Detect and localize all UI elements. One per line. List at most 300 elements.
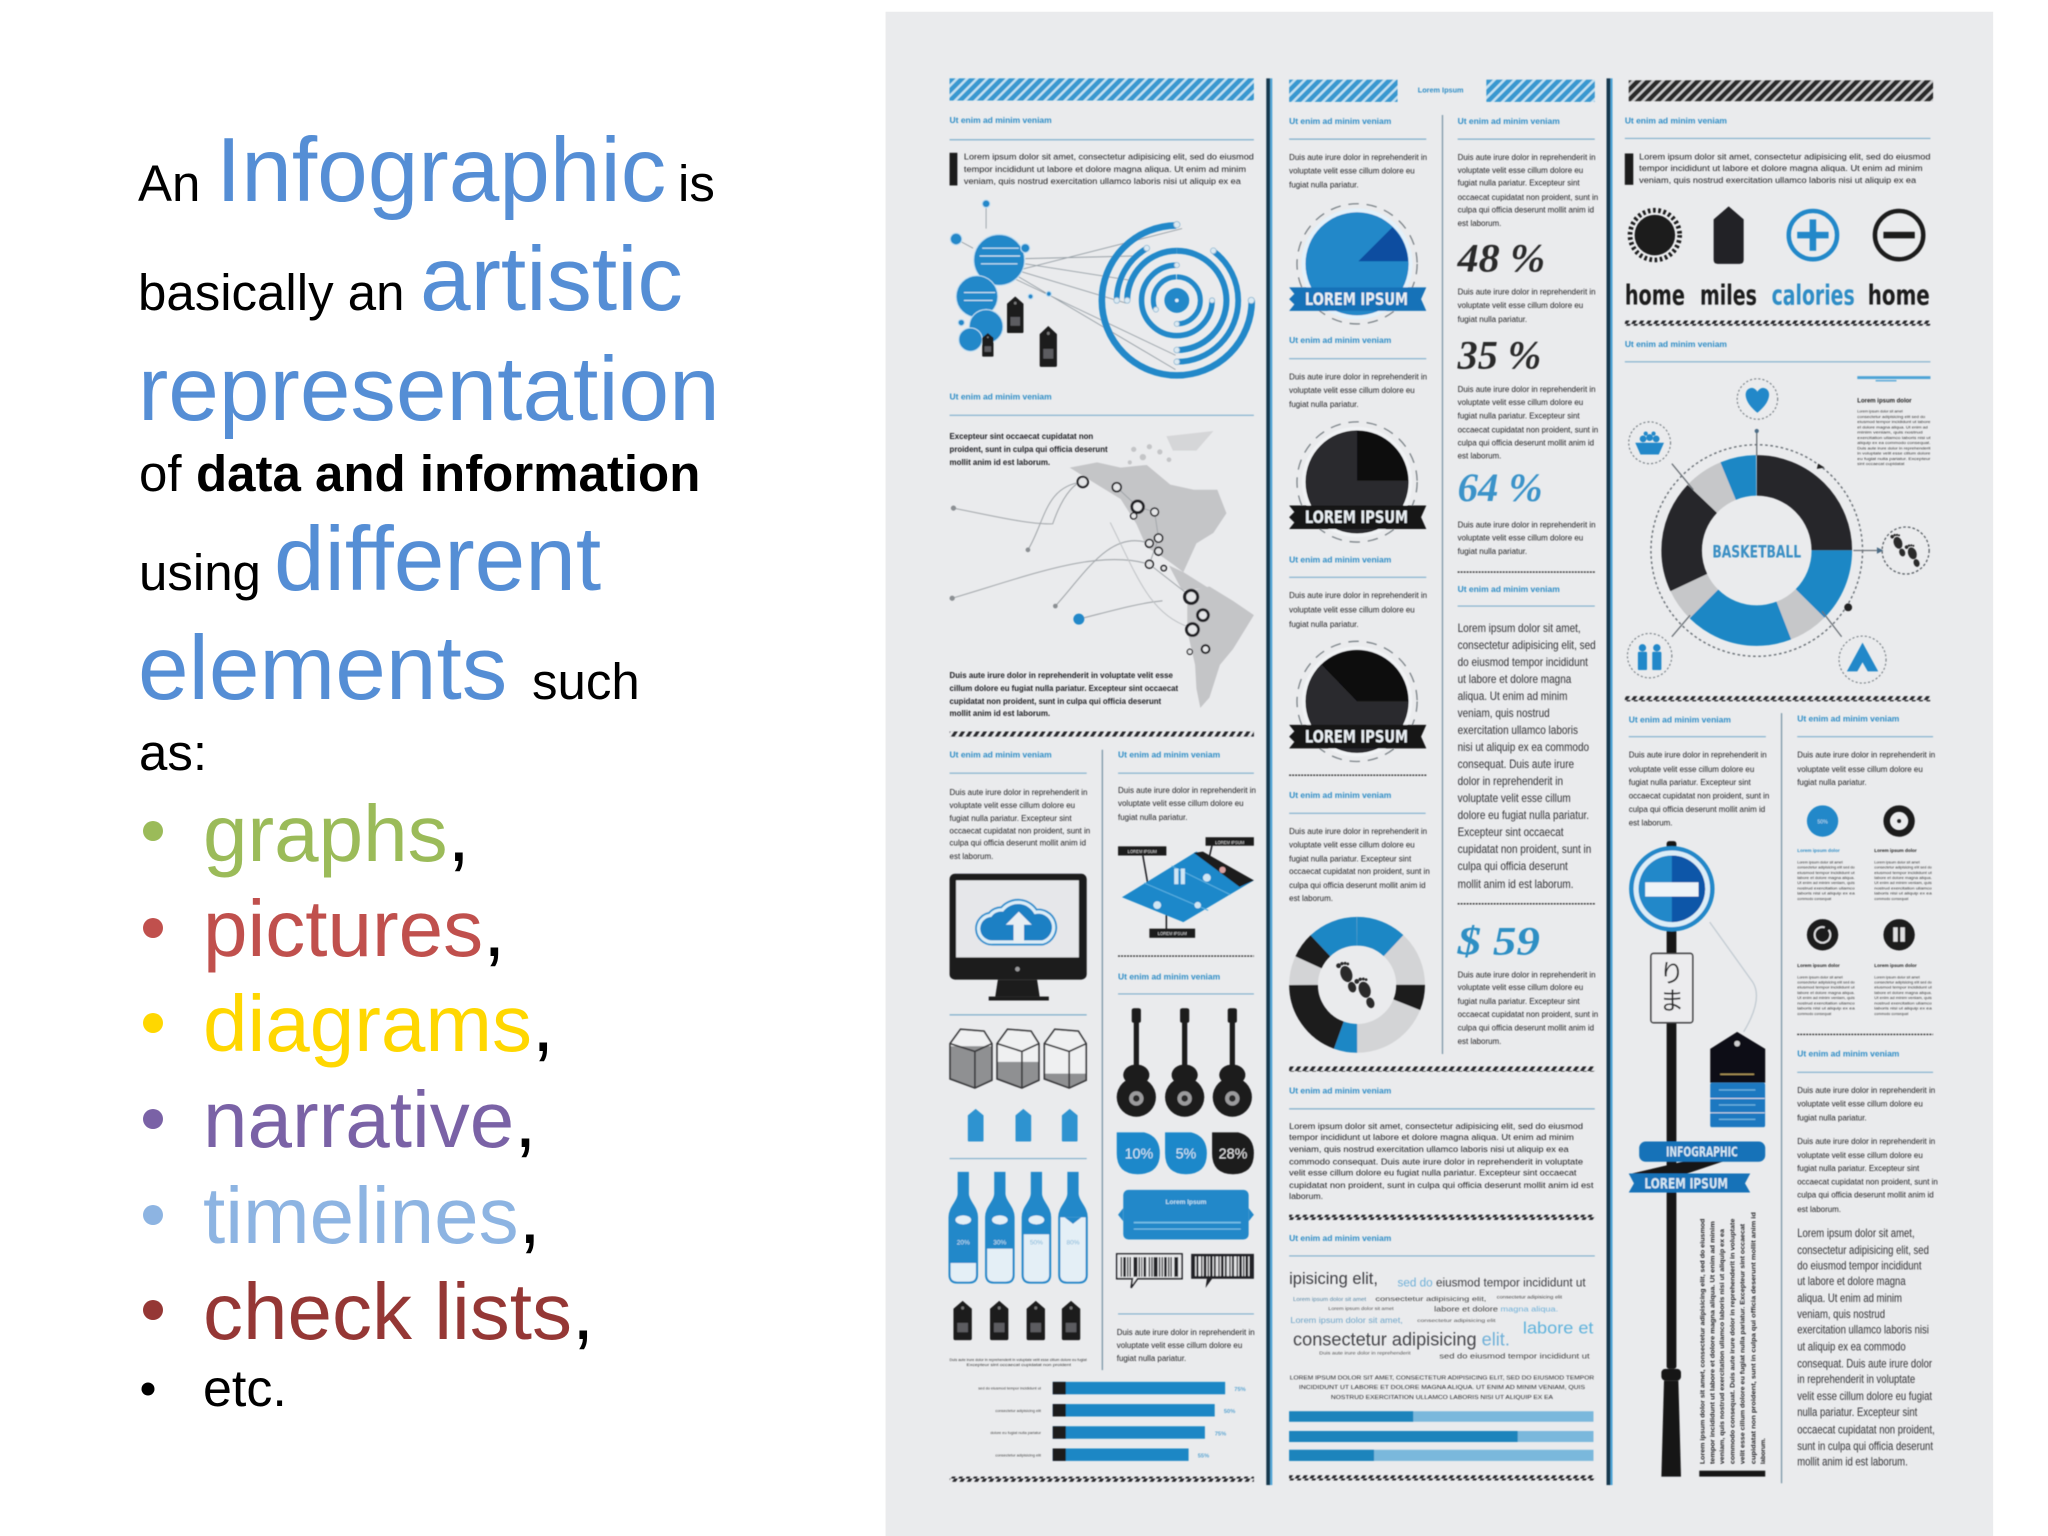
paragraph: fugiat nulla pariatur. — [1289, 181, 1359, 190]
bottles: 50% — [1030, 1240, 1043, 1247]
basketball donut with surrounding icons — [1627, 379, 1929, 683]
paragraph: voluptate velit esse cillum dolore eu — [1797, 1099, 1923, 1108]
rotated text block: laborum. — [1760, 1438, 1767, 1464]
four icon blurbs: labore et dolore magna aliqua. — [1874, 876, 1932, 880]
four icon blurbs: consectetur adipisicing elit sed do — [1797, 866, 1855, 870]
four icon blurbs: commodo consequat — [1797, 1012, 1832, 1016]
lower-left sub-column — [950, 750, 1090, 1367]
four icon blurbs: commodo consequat — [1874, 1012, 1909, 1016]
black tags under bottles — [953, 1301, 1080, 1340]
paragraph: fugiat nulla pariatur. — [1117, 1354, 1186, 1363]
diagram: bubbles linked to concentric rings — [950, 200, 1254, 375]
long text block — [1458, 622, 1596, 891]
column divider bars — [1266, 78, 1613, 1485]
barcodes — [1117, 1254, 1254, 1288]
heading: Ut enim ad minim veniam — [1797, 714, 1899, 724]
paragraph: est laborum. — [1289, 894, 1333, 903]
full-width paragraph: cupidatat non proident, sunt in culpa qui officia deserunt mollit anim id est — [1289, 1181, 1594, 1190]
paragraph: fugiat nulla pariatur. — [1289, 620, 1359, 629]
percentage drops: 10% — [1125, 1147, 1154, 1163]
right column lower-right — [1797, 714, 1938, 1469]
icon: tag — [1714, 206, 1744, 264]
four icon blurbs: laboris nisi ut aliquip ex ea — [1874, 1007, 1933, 1011]
line: as: as: — [139, 724, 207, 781]
long text block: dolor in reprehenderit in — [1458, 775, 1563, 788]
heading: Ut enim ad minim veniam — [1289, 554, 1391, 564]
caps caption — [1290, 1375, 1594, 1401]
right column top — [1625, 80, 1933, 701]
paragraph: voluptate velit esse cillum dolore eu — [1289, 386, 1415, 395]
paragraph: occaecat cupidatat non proident, sunt in — [950, 826, 1090, 835]
stat 64 percent: 64 % — [1458, 465, 1543, 510]
concentric ring chart — [1102, 225, 1252, 375]
paragraph: fugiat nulla pariatur. — [1458, 547, 1527, 556]
bullet list: narrative, — [203, 1075, 536, 1164]
intro block with bar: veniam, quis nostrud exercitation ullamco laboris nisi ut aliquip ex ea — [1639, 176, 1917, 185]
heading: Ut enim ad minim veniam — [1289, 1233, 1391, 1243]
icon labels — [1625, 280, 1930, 311]
paragraph: fugiat nulla pariatur. — [1458, 315, 1527, 324]
four icon blurbs: nostrud exercitation ullamco — [1874, 886, 1932, 890]
long text block: aliqua. Ut enim ad minim — [1458, 690, 1567, 703]
long text block: consectetur adipisicing elit, sed — [1458, 639, 1596, 652]
line: elements such: such — [532, 653, 640, 710]
long text block: culpa qui officia deserunt — [1458, 860, 1568, 873]
paragraph: voluptate velit esse cillum dolore eu — [1629, 765, 1754, 774]
paragraph: voluptate velit esse cillum dolore eu — [1118, 799, 1244, 808]
icon: ship — [1629, 422, 1671, 464]
heading: Ut enim ad minim veniam — [1629, 714, 1731, 724]
four icon blurbs: eiusmod tempor incididunt ut — [1874, 986, 1933, 990]
dark pie badge two: LOREM IPSUM — [1305, 728, 1408, 748]
long text block: exercitation ullamco laboris nisi — [1797, 1324, 1929, 1337]
intro block with bar: tempor incididunt ut labore et dolore magna aliqua. Ut enim ad minim — [1639, 164, 1923, 173]
hanging black tags — [982, 296, 1057, 367]
long text block: ut aliquip ex ea commodo — [1797, 1341, 1906, 1354]
route rings — [1078, 477, 1209, 654]
horizontal bar chart: consectetur adipisicing elit — [995, 1408, 1042, 1413]
full-width paragraph: laborum. — [1289, 1192, 1323, 1201]
paragraph: voluptate velit esse cillum dolore eu — [950, 801, 1075, 810]
side note — [1857, 376, 1932, 466]
four icon blurbs — [1797, 805, 1933, 1016]
paragraph — [1797, 1137, 1938, 1214]
map intro text — [950, 431, 1108, 467]
four icon blurbs: laboris nisi ut aliquip ex ea — [1874, 892, 1933, 896]
section heading: Ut enim ad minim veniam — [950, 115, 1052, 125]
heading: Ut enim ad minim veniam — [1625, 116, 1727, 126]
long text block: do eiusmod tempor incididunt — [1458, 656, 1588, 669]
striped header bar — [950, 78, 1254, 101]
four icon blurbs: Lorem ipsum dolor — [1874, 963, 1917, 968]
map caption: mollit anim id est laborum. — [950, 708, 1050, 718]
paragraph: culpa qui officia deserunt mollit anim id — [1458, 1024, 1594, 1033]
long text block: ut labore et dolore magna — [1458, 673, 1572, 686]
guitars — [1117, 1008, 1252, 1117]
four icon blurbs: nostrud exercitation ullamco — [1797, 886, 1855, 890]
map of the Americas with route rings — [950, 431, 1254, 708]
percentage drops — [1117, 1132, 1254, 1174]
icon: minus — [1875, 211, 1923, 259]
word cloud: consectetur adipisicing elit. — [1293, 1328, 1510, 1349]
four icon blurbs: eiusmod tempor incididunt ut — [1874, 871, 1933, 875]
long text block: Lorem ipsum dolor sit amet, — [1797, 1227, 1915, 1240]
paragraph: Duis aute irure dolor in reprehenderit in — [1289, 153, 1427, 162]
four icon blurbs: Ut enim ad minim veniam, quis — [1874, 881, 1932, 885]
side note: Duis aute irure dolor in reprehenderit — [1857, 446, 1932, 450]
rotated text block — [1699, 1212, 1767, 1464]
four icon blurbs: 50% — [1817, 820, 1828, 826]
icon: plus — [1789, 211, 1837, 259]
line: of data and information: of — [139, 445, 182, 502]
long text block: occaecat cupidatat non proident, — [1797, 1424, 1935, 1437]
rotated text block: veniam, quis nostrud exercitation ullamco laboris nisi ut aliquip ex ea — [1719, 1229, 1726, 1464]
paragraph: Duis aute irure dolor in reprehenderit in — [1458, 521, 1596, 530]
long text block: consequat. Duis aute irure dolor — [1797, 1358, 1932, 1371]
long text block: veniam, quis nostrud — [1797, 1308, 1885, 1321]
paragraph: voluptate velit esse cillum dolore eu — [1117, 1341, 1242, 1350]
paragraph: Duis aute irure dolor in reprehenderit in — [1289, 827, 1427, 836]
four icon blurbs: consectetur adipisicing elit sed do — [1874, 866, 1932, 870]
blue bubbles — [950, 200, 1051, 351]
four icon blurbs: laboris nisi ut aliquip ex ea — [1797, 1007, 1856, 1011]
full-width paragraph: commodo consequat. Duis aute irure dolor in reprehenderit in voluptate — [1289, 1157, 1584, 1166]
tiny note: Duis aute irure dolor in reprehenderit in voluptate velit esse cillum dolore eu fugiat — [950, 1358, 1088, 1362]
heading: Ut enim ad minim veniam — [1289, 1086, 1391, 1096]
paragraph — [1289, 153, 1427, 190]
word cloud: consectetur adipisicing elit — [1497, 1294, 1563, 1299]
rotated text block: tempor incididunt ut labore et dolore magna aliqua. Ut enim ad minim — [1709, 1221, 1716, 1464]
paragraph: Duis aute irure dolor in reprehenderit in — [1458, 971, 1596, 980]
isometric map tile: LOREM IPSUM — [1158, 931, 1187, 936]
long text block: do eiusmod tempor incididunt — [1797, 1260, 1922, 1273]
side note: exercitation ullamco laboris nisi ut — [1857, 436, 1932, 440]
caps caption: LOREM IPSUM DOLOR SIT AMET, CONSECTETUR ADIPISICING ELIT, SED DO EIUSMOD TEMPOR — [1290, 1375, 1594, 1381]
blue ribbon box: Lorem Ipsum — [1165, 1199, 1207, 1206]
word cloud: sed do eiusmod tempor incididunt ut — [1439, 1353, 1590, 1360]
paragraph: voluptate velit esse cillum dolore eu — [1289, 167, 1415, 176]
line: elements such: elements — [138, 618, 507, 719]
side note: eiusmod tempor incididunt ut labore — [1857, 420, 1930, 424]
icon: people — [1627, 633, 1672, 678]
line: An Infographic is: Infographic — [216, 120, 666, 221]
paragraph: culpa qui officia deserunt mollit anim id — [1458, 438, 1594, 447]
paragraph: voluptate velit esse cillum dolore eu — [1458, 534, 1583, 543]
paragraph — [1629, 751, 1769, 827]
heading: Ut enim ad minim veniam — [1118, 750, 1220, 760]
bullet list: pictures, — [203, 884, 505, 973]
paragraph: Duis aute irure dolor in reprehenderit in — [1797, 751, 1935, 760]
section heading: map: Ut enim ad minim veniam — [950, 392, 1052, 402]
monitor with cloud upload icon — [950, 874, 1087, 1000]
side note: in voluptate velit esse cillum dolore — [1857, 452, 1930, 456]
paragraph: Duis aute irure dolor in reprehenderit in — [1629, 751, 1767, 760]
paragraph: fugiat nulla pariatur. Excepteur sint — [1458, 997, 1580, 1006]
paragraph: fugiat nulla pariatur. — [1797, 1114, 1867, 1123]
word cloud: ipisicing elit, — [1289, 1269, 1378, 1288]
paragraph — [1458, 971, 1598, 1046]
paragraph — [1289, 373, 1427, 409]
horizontal bar chart: dolore eu fugiat nulla pariatur — [990, 1430, 1042, 1435]
paragraph: fugiat nulla pariatur. Excepteur sint — [950, 814, 1072, 823]
long text block: velit esse cillum dolore eu fugiat — [1797, 1390, 1932, 1403]
line: representation: representation — [138, 339, 720, 440]
long text block: aliqua. Ut enim ad minim — [1797, 1292, 1902, 1306]
bullet list: etc. — [203, 1360, 287, 1418]
paragraph: fugiat nulla pariatur. Excepteur sint — [1458, 178, 1580, 187]
long text block: mollit anim id est laborum. — [1458, 878, 1573, 891]
paragraph: fugiat nulla pariatur. Excepteur sint — [1629, 778, 1752, 787]
map intro text: mollit anim id est laborum. — [950, 457, 1050, 467]
dark pie badge one — [1289, 422, 1426, 542]
icon: heart — [1737, 379, 1778, 419]
paragraph: fugiat nulla pariatur. — [1289, 400, 1359, 409]
horizontal bar chart: 75% — [1215, 1431, 1226, 1437]
paragraph: Duis aute irure dolor in reprehenderit in — [1117, 1328, 1255, 1337]
heading: Ut enim ad minim veniam — [950, 750, 1052, 760]
heading: Ut enim ad minim veniam — [1289, 335, 1391, 345]
horizontal bar chart: sed do eiusmod tempor incididunt ut — [978, 1386, 1042, 1391]
word cloud: Lorem ipsum dolor sit amet, — [1290, 1316, 1403, 1325]
heading: Ut enim ad minim veniam — [1118, 972, 1220, 982]
four icon blurbs: consectetur adipisicing elit sed do — [1874, 981, 1932, 985]
long text block: mollit anim id est laborum. — [1797, 1456, 1908, 1469]
ribbons: INFOGRAPHIC — [1666, 1146, 1738, 1161]
paragraph: est laborum. — [1629, 818, 1673, 827]
word cloud: Duis aute irure dolor in reprehenderit — [1319, 1350, 1412, 1355]
long text block: consectetur adipisicing elit, sed — [1797, 1244, 1929, 1257]
long text block: nulla pariatur. Excepteur sint — [1797, 1406, 1917, 1419]
paragraph — [1117, 1328, 1255, 1363]
donut chart — [1682, 475, 1832, 626]
icon labels: calories — [1772, 280, 1855, 311]
word cloud: labore et — [1523, 1320, 1594, 1338]
no-entry sign — [1631, 848, 1712, 929]
middle column right sub-column — [1456, 116, 1598, 1046]
plate with Japanese text: り — [1659, 954, 1684, 990]
paragraph — [1289, 827, 1430, 903]
right column lower-left: road sign — [1629, 714, 1769, 1477]
long text block: veniam, quis nostrud — [1458, 707, 1550, 720]
middle column — [1289, 80, 1595, 1038]
striped header with title — [1289, 80, 1595, 102]
isometric map tile: LOREM IPSUM — [1128, 849, 1157, 854]
blue pie badge — [1289, 204, 1426, 324]
paragraph: fugiat nulla pariatur. Excepteur sint — [1797, 1164, 1920, 1173]
four icon blurbs: Ut enim ad minim veniam, quis — [1797, 881, 1855, 885]
stat 35 percent: 35 % — [1457, 332, 1541, 377]
infographic panel — [886, 12, 1993, 1536]
long text block: in reprehenderit in voluptate — [1797, 1373, 1915, 1386]
paragraph — [1458, 288, 1596, 324]
full-width paragraph — [1289, 1122, 1594, 1201]
horizontal bar chart: 50% — [1224, 1409, 1235, 1415]
side note: eu fugiat nulla pariatur. Excepteur — [1857, 457, 1931, 461]
paragraph — [1458, 153, 1598, 228]
intro block with bar: Lorem ipsum dolor sit amet, consectetur adipisicing elit, sed do eiusmod — [1639, 152, 1930, 161]
side note: et dolore magna aliqua. Ut enim ad — [1857, 425, 1928, 429]
paragraph: voluptate velit esse cillum dolore eu — [1458, 301, 1583, 310]
striped header with title: Lorem Ipsum — [1418, 86, 1464, 95]
blue ribbon box — [1118, 1190, 1254, 1240]
curved string — [1710, 922, 1756, 1032]
paragraph: culpa qui officia deserunt mollit anim id — [1458, 205, 1594, 214]
tiny note: Excepteur sint occaecat cupidatat non proident — [967, 1363, 1072, 1367]
icon: sun — [1630, 210, 1680, 260]
paragraph — [950, 788, 1090, 861]
paragraph — [1797, 1086, 1935, 1123]
paragraph: culpa qui officia deserunt mollit anim id — [1629, 805, 1765, 814]
side note: sint occaecat cupidatat — [1857, 462, 1905, 466]
paragraph: culpa qui officia deserunt mollit anim id — [950, 839, 1086, 848]
route lines — [952, 482, 1191, 627]
paragraph: Duis aute irure dolor in reprehenderit in — [1118, 786, 1256, 795]
word cloud: Lorem ipsum dolor sit amet — [1328, 1306, 1395, 1311]
heading: Ut enim ad minim veniam — [1289, 116, 1391, 126]
bottles: 80% — [1066, 1240, 1080, 1247]
sign pole — [1661, 841, 1681, 1477]
paragraph: fugiat nulla pariatur. Excepteur sint — [1289, 854, 1412, 863]
isometric map tile — [1118, 837, 1254, 938]
stat 59 dollars: $ 59 — [1456, 918, 1540, 963]
middle column bottom block — [1289, 1066, 1595, 1480]
four icon blurbs: labore et dolore magna aliqua. — [1797, 876, 1855, 880]
paragraph: occaecat cupidatat non proident, sunt in — [1458, 193, 1598, 202]
paragraph — [1458, 521, 1596, 556]
paragraph: occaecat cupidatat non proident, sunt in — [1458, 425, 1598, 434]
paragraph: occaecat cupidatat non proident, sunt in — [1797, 1178, 1938, 1187]
four icon blurbs: Lorem ipsum dolor sit amet — [1797, 975, 1844, 979]
line: An Infographic is: An — [138, 155, 200, 212]
word cloud: labore et dolore magna aliqua. — [1434, 1306, 1558, 1313]
line: using different: using — [139, 544, 261, 601]
paragraph: voluptate velit esse cillum dolore eu — [1797, 1151, 1923, 1160]
rotated text block: velit esse cillum dolore eu fugiat nulla pariatur. Excepteur sint occaecat — [1739, 1223, 1746, 1464]
four icon blurbs: labore et dolore magna aliqua. — [1797, 991, 1855, 995]
line: basically an artistic: artistic — [420, 229, 683, 330]
milk cartons — [950, 1029, 1087, 1089]
dashed orbit — [1651, 445, 1863, 656]
four icon blurbs: consectetur adipisicing elit sed do — [1797, 981, 1855, 985]
icon labels: home — [1868, 280, 1930, 311]
paragraph: est laborum. — [1797, 1205, 1841, 1214]
paragraph: est laborum. — [1458, 219, 1501, 228]
four icon blurbs: Ut enim ad minim veniam, quis — [1874, 996, 1932, 1000]
map intro text: proident, sunt in culpa qui officia deserunt — [950, 444, 1108, 454]
long text block: Excepteur sint occaecat — [1458, 826, 1564, 839]
paragraph: voluptate velit esse cillum dolore eu — [1458, 398, 1583, 407]
paragraph: culpa qui officia deserunt mollit anim id — [1289, 881, 1426, 890]
four icon blurbs: Lorem ipsum dolor — [1797, 963, 1840, 968]
paragraph: culpa qui officia deserunt mollit anim id — [1797, 1191, 1934, 1200]
icon: footprints — [1882, 527, 1929, 574]
side note: Lorem ipsum dolor — [1857, 398, 1912, 404]
bottles — [950, 1173, 1087, 1283]
paragraph: Duis aute irure dolor in reprehenderit in — [1797, 1137, 1935, 1146]
long text block: Lorem ipsum dolor sit amet, — [1458, 622, 1581, 635]
side note: minim veniam, quis nostrud — [1857, 431, 1923, 435]
long text block — [1797, 1227, 1935, 1469]
paragraph: occaecat cupidatat non proident, sunt in — [1458, 1010, 1598, 1019]
paragraph: voluptate velit esse cillum dolore eu — [1458, 983, 1583, 992]
rotated text block: Lorem ipsum dolor sit amet, consectetur adipisicing elit, sed do eiusmod — [1699, 1219, 1706, 1464]
side note: consectetur adipisicing elit sed do — [1857, 415, 1925, 419]
bullet list: check lists, — [203, 1267, 594, 1356]
intro block with dark bar: Lorem ipsum dolor sit amet, consectetur adipisicing elit, sed do eiusmod — [964, 152, 1254, 161]
plate with Japanese text: ま — [1659, 982, 1684, 1018]
hanging info tag — [1710, 1032, 1765, 1127]
dark striped header — [1629, 80, 1933, 101]
arrows — [1672, 429, 1883, 637]
map intro text: Excepteur sint occaecat cupidatat non — [950, 431, 1093, 441]
icon labels: miles — [1700, 280, 1757, 311]
four icon blurbs: eiusmod tempor incididunt ut — [1797, 871, 1856, 875]
four icon blurbs: commodo consequat — [1797, 897, 1832, 901]
paragraph: Duis aute irure dolor in reprehenderit in — [1458, 153, 1596, 162]
percentage drops: 5% — [1176, 1147, 1197, 1163]
word cloud — [1289, 1269, 1594, 1360]
heading: Ut enim ad minim veniam — [1625, 339, 1727, 349]
side note: aliquip ex ea commodo consequat. — [1857, 441, 1930, 445]
panel background — [886, 12, 1993, 1536]
word cloud: consectetur adipisicing elit — [1417, 1318, 1497, 1323]
centre label: BASKETBALL — [1712, 543, 1801, 563]
bottles: 30% — [993, 1240, 1007, 1247]
dark pie badge two — [1289, 641, 1426, 761]
map caption: Duis aute irure dolor in reprehenderit in voluptate velit esse — [950, 670, 1173, 680]
heading: Ut enim ad minim veniam — [1458, 584, 1560, 594]
full-width paragraph: Lorem ipsum dolor sit amet, consectetur adipisicing elit, sed do eiusmod — [1289, 1122, 1583, 1131]
ribbons: LOREM IPSUM — [1644, 1177, 1728, 1193]
side note: Lorem ipsum dolor sit amet — [1857, 410, 1904, 414]
four icon blurbs: labore et dolore magna aliqua. — [1874, 991, 1932, 995]
paragraph: Duis aute irure dolor in reprehenderit in — [950, 788, 1087, 797]
bullet list: diagrams, — [203, 979, 554, 1068]
four icon blurbs: laboris nisi ut aliquip ex ea — [1797, 892, 1856, 896]
paragraph: occaecat cupidatat non proident, sunt in — [1289, 867, 1430, 876]
long text block: dolore eu fugiat nulla pariatur. — [1458, 809, 1589, 822]
four icon blurbs: Lorem ipsum dolor — [1797, 848, 1840, 853]
paragraph — [1118, 786, 1256, 822]
blue pie badge: LOREM IPSUM — [1305, 290, 1408, 310]
heading: Ut enim ad minim veniam — [1289, 790, 1391, 800]
dark pie badge one: LOREM IPSUM — [1305, 508, 1408, 528]
full-width paragraph: velit esse cillum dolore eu fugiat nulla pariatur. Excepteur sint occaecat — [1289, 1169, 1577, 1178]
bottles: 20% — [957, 1240, 970, 1247]
paragraph: Duis aute irure dolor in reprehenderit in — [1289, 591, 1427, 600]
lower-right sub-column of column A — [1117, 750, 1256, 1363]
paragraph: fugiat nulla pariatur. — [1118, 813, 1187, 822]
horizontal bar chart: consectetur adipisicing elit — [995, 1452, 1042, 1457]
percentage drops: 28% — [1219, 1147, 1248, 1163]
paragraph: fugiat nulla pariatur. — [1797, 778, 1867, 787]
full-width paragraph: tempor incididunt ut labore et dolore magna aliqua. Ut enim ad minim — [1289, 1133, 1574, 1142]
rotated text block: commodo consequat. Duis aute irure dolor in reprehenderit in voluptate — [1730, 1218, 1737, 1464]
four icon blurbs: nostrud exercitation ullamco — [1874, 1001, 1932, 1005]
heading: Ut enim ad minim veniam — [1797, 1048, 1899, 1058]
paragraph: fugiat nulla pariatur. Excepteur sint — [1458, 412, 1580, 421]
icon: tent — [1839, 636, 1886, 683]
bullet list: graphs, — [203, 789, 470, 878]
paragraph: Duis aute irure dolor in reprehenderit in — [1797, 1086, 1935, 1095]
paragraph: voluptate velit esse cillum dolore eu — [1289, 606, 1415, 615]
landmasses — [1070, 431, 1254, 708]
paragraph: Duis aute irure dolor in reprehenderit in — [1458, 288, 1596, 297]
long text block: nisi ut aliquip ex ea commodo — [1458, 741, 1589, 754]
tiny note — [950, 1358, 1088, 1367]
four icon blurbs: Lorem ipsum dolor sit amet — [1797, 860, 1844, 864]
four icon blurbs: commodo consequat — [1874, 897, 1909, 901]
